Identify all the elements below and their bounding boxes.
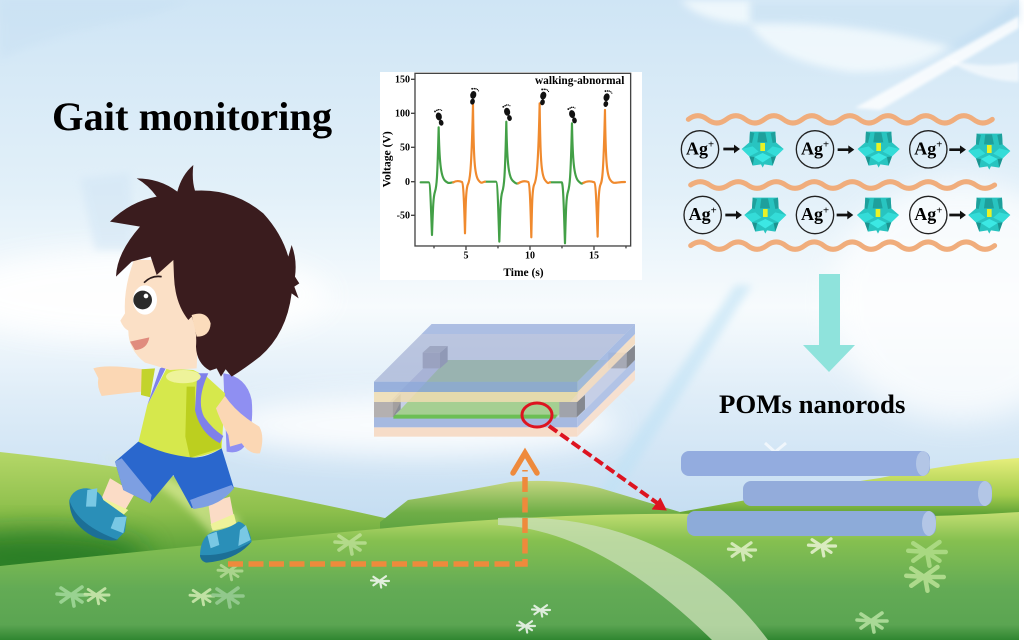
- y axis tick labels: 100: [395, 109, 410, 120]
- eyebrow: [144, 276, 162, 283]
- mouth: [130, 337, 149, 350]
- orange traces: [453, 103, 625, 237]
- panel: Ag+ to POM conversion: Ag: [914, 138, 936, 158]
- y axis tick labels: 50: [400, 143, 410, 154]
- spacers: [374, 345, 635, 417]
- right shoe: [200, 522, 252, 563]
- marker: red circle: [522, 403, 552, 427]
- panel: Ag+ to POM conversion: +: [936, 140, 942, 151]
- panel: Ag+ to POM conversion: Ag: [801, 138, 823, 158]
- upper peach layer: [374, 334, 635, 417]
- hills: [0, 452, 1019, 640]
- title: Gait monitoring: [52, 94, 332, 139]
- bottom substrate: [374, 370, 635, 437]
- panel: Ag+ to POM conversion: Ag: [686, 138, 708, 158]
- y axis tick labels: 0: [405, 177, 410, 188]
- backpack: [223, 373, 252, 452]
- panel: Ag+ to POM conversion: +: [708, 140, 714, 151]
- panel: Ag+ to POM conversion: +: [711, 205, 717, 216]
- flowers on grass: [57, 443, 946, 633]
- x axis tick labels: 15: [589, 251, 599, 262]
- arrow: teal down: [803, 274, 855, 372]
- panel: Ag+ to POM conversion: +: [936, 205, 942, 216]
- y axis tick labels: [395, 75, 410, 222]
- footprints: [434, 87, 613, 127]
- ear: [192, 314, 211, 337]
- y axis tick labels: -50: [397, 211, 410, 222]
- far arm: [93, 366, 143, 396]
- left shoe: [69, 488, 127, 540]
- device: layered sensor: [374, 324, 635, 437]
- panel: Ag+ to POM conversion: Ag: [689, 204, 711, 224]
- lower electrode: [374, 360, 635, 427]
- POM clusters: [742, 132, 1010, 234]
- near arm: [216, 396, 262, 454]
- panel: Ag+ to POM conversion: Ag: [914, 204, 936, 224]
- x axis tick labels: [463, 251, 599, 262]
- plot frame: [415, 73, 631, 246]
- eye: [133, 285, 157, 315]
- panel: Ag+ to POM conversion: +: [823, 140, 829, 151]
- legs: [102, 478, 235, 528]
- x axis tick labels: 5: [463, 251, 468, 262]
- panel: voltage chart: Voltage (V): [381, 131, 394, 187]
- y axis tick labels: 150: [395, 75, 410, 86]
- nanorods: [681, 451, 992, 536]
- panel: voltage chart: [380, 72, 642, 280]
- chart label: walking-abnormal: [535, 75, 624, 87]
- panel: Ag+ to POM conversion: Ag: [801, 204, 823, 224]
- neck and face: [120, 260, 202, 370]
- polymer waves: [688, 116, 995, 249]
- shorts: [115, 442, 234, 508]
- axis titles: Time (s): [503, 267, 544, 279]
- top plate: [374, 324, 635, 392]
- Ag+ ions: [681, 131, 947, 234]
- panel: Ag+ to POM conversion: +: [823, 205, 829, 216]
- character: walking boy: [69, 165, 299, 563]
- arrows: [723, 145, 966, 219]
- x axis tick labels: 10: [525, 251, 535, 262]
- green film: [393, 360, 607, 419]
- panel: Ag+ to POM conversion: [681, 116, 1010, 249]
- label: POMs nanorods: POMs nanorods: [719, 389, 905, 419]
- green traces: [421, 122, 583, 243]
- hair: [110, 165, 299, 377]
- torso: [138, 368, 225, 458]
- arrow: orange dashed path: [228, 453, 537, 564]
- straps: [147, 365, 223, 443]
- arrow: red dashed: [549, 426, 666, 510]
